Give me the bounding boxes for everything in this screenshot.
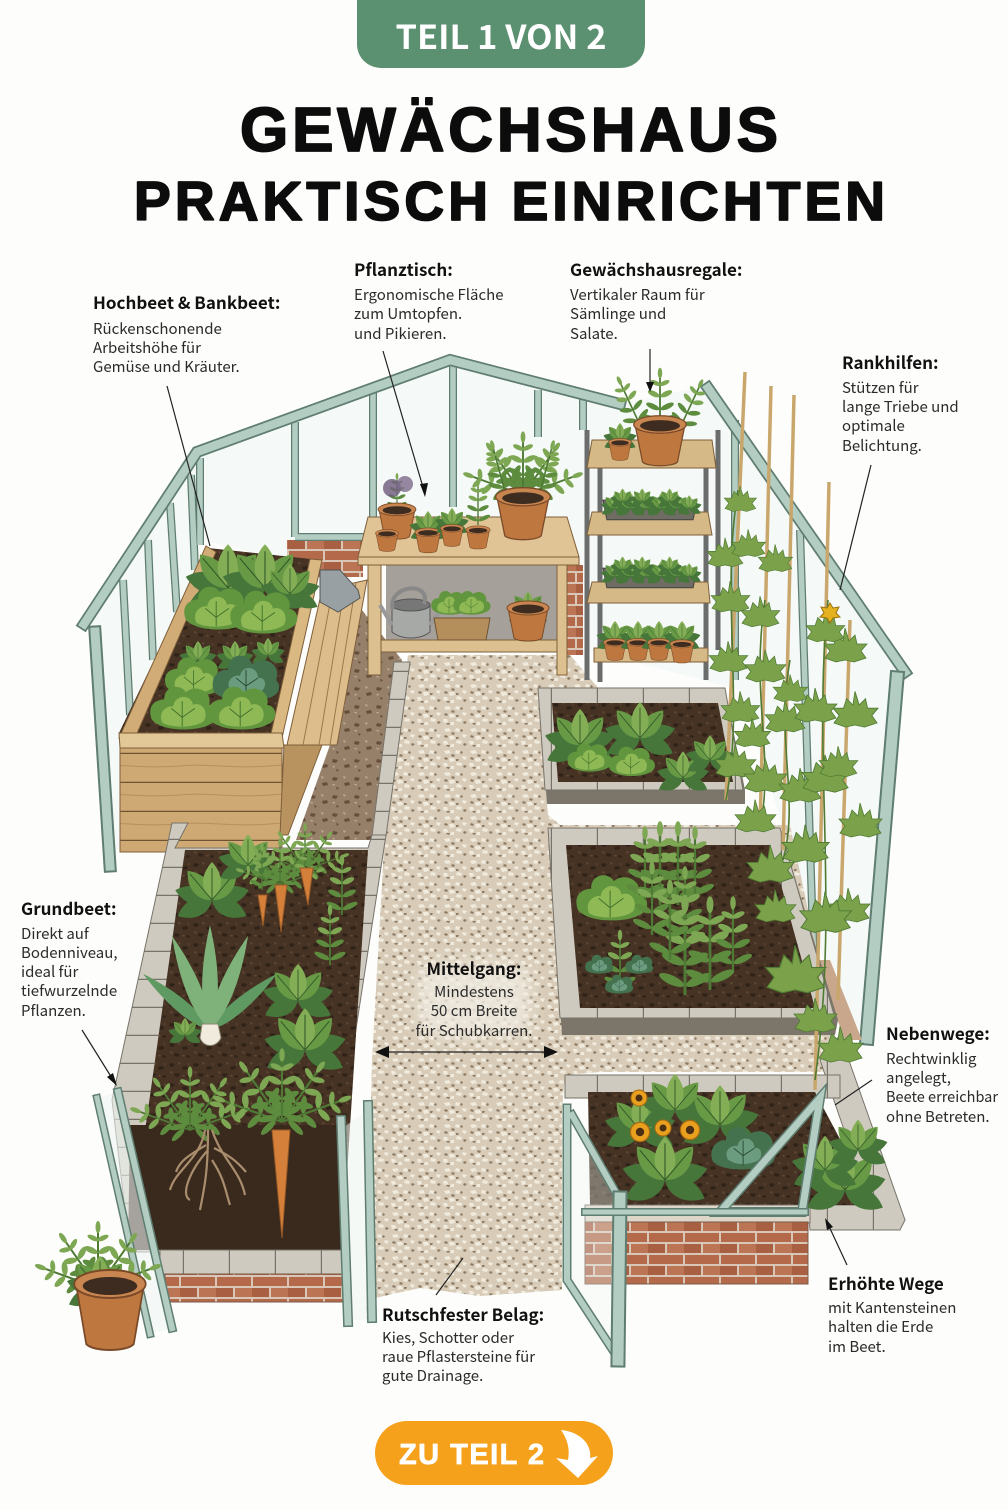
label: Hochbeet & Bankbeet: Arbeitshöhe für (93, 337, 201, 358)
yellow blossom (820, 603, 840, 623)
label: Pflanztisch: Ergonomische Fläche (354, 284, 504, 305)
title: PRAKTISCH EINRICHTEN (134, 170, 885, 232)
label: Rankhilfen: Stützen für (842, 377, 919, 398)
label: Nebenwege: Nebenwege: (886, 1020, 990, 1045)
terracotta pot in foreground (29, 1221, 167, 1350)
bench (280, 570, 367, 835)
label: Rankhilfen: optimale (842, 415, 905, 436)
icon: curved arrow (556, 1430, 598, 1478)
label: Mittelgang: Mindestens (434, 981, 514, 1002)
label: Pflanztisch: zum Umtopfen. (354, 303, 462, 324)
raised bed plants (150, 544, 321, 729)
label: Erhöhte Wege (828, 1270, 956, 1357)
label: Grundbeet: Direkt auf (21, 923, 90, 944)
label: Mittelgang (416, 955, 532, 1041)
label: Hochbeet & Bankbeet: Hochbeet & Bankbeet: (93, 289, 280, 314)
label: Erhöhte Wege: halten die Erde (828, 1316, 933, 1337)
label: Pflanztisch (354, 256, 504, 344)
title: GEWÄCHSHAUS (240, 96, 778, 165)
path edge stones (372, 662, 410, 836)
greenhouse structure: glass walls and frame (84, 360, 905, 1040)
button: to part 2: ZU TEIL 2 (399, 1439, 544, 1471)
label: Gewächshausregale: Salate. (570, 323, 618, 344)
watering can (380, 588, 445, 638)
panel: potting table (358, 431, 589, 675)
label: Nebenwege (886, 1020, 998, 1127)
panel: right bed 2 (548, 821, 838, 1035)
label: Erhöhte Wege: im Beet. (828, 1336, 886, 1357)
panel: ground-level bed (112, 823, 386, 1302)
terracotta pot on shelf (507, 591, 549, 641)
gravel main aisle and side paths (366, 655, 840, 1320)
panel: right bed 3 with brick base (565, 1035, 905, 1284)
label: Erhöhte Wege: mit Kantensteinen (828, 1297, 956, 1318)
label: Rankhilfen: lange Triebe und (842, 396, 959, 417)
label: Rankhilfen (842, 349, 959, 456)
panel: doors at right bed (567, 1098, 820, 1360)
label: Grundbeet: Bodenniveau, (21, 942, 118, 963)
header tab: part indicator: TEIL 1 VON 2 (396, 11, 606, 59)
label: Rankhilfen: Belichtung. (842, 435, 922, 456)
label: Grundbeet: tiefwurzelnde (21, 980, 117, 1001)
bed plants (124, 823, 359, 1238)
header tab: part indicator (357, 0, 645, 68)
label: Gewächshausregale: Vertikaler Raum für (570, 284, 705, 305)
panel: doors left of the main aisle (97, 1092, 372, 1334)
leader lines and arrows (82, 349, 872, 1295)
label: Gewächshausregale: Sämlinge und (570, 303, 666, 324)
label: Pflanztisch: Pflanztisch: (354, 256, 453, 281)
label: Grundbeet: Pflanzen. (21, 1000, 86, 1021)
trellis poles with climbing vines (707, 372, 882, 1090)
panel: raised bed with bench (119, 544, 367, 852)
label: Grundbeet: ideal für (21, 961, 79, 982)
label: Rutschfester Belag: raue Pflastersteine für (382, 1346, 535, 1367)
label: Mittelgang: 50 cm Breite (431, 1000, 517, 1021)
label: Pflanztisch: und Pikieren. (354, 323, 447, 344)
panel: greenhouse shelves (587, 368, 718, 682)
button: to part 2 (375, 1421, 613, 1485)
label: Nebenwege: angelegt, (886, 1067, 951, 1088)
label: Grundbeet: Grundbeet: (21, 895, 117, 920)
panel: right bed 1 (538, 688, 745, 804)
label: Mittelgang: Mittelgang: (427, 955, 521, 980)
label: Rankhilfen: Rankhilfen: (842, 349, 938, 374)
label: Rutschfester Belag: Rutschfester Belag: (382, 1301, 544, 1326)
flowers and vegetables (603, 1074, 889, 1217)
leek (139, 925, 281, 1046)
label: Rutschfester Belag: gute Drainage. (382, 1365, 483, 1386)
label: Nebenwege: Beete erreichbar (886, 1086, 998, 1107)
label: Erhöhte Wege: Erhöhte Wege (828, 1270, 944, 1295)
faded gravel behind the aisle label (418, 962, 530, 1038)
label: Hochbeet & Bankbeet (93, 289, 280, 377)
shelf plants (595, 368, 716, 663)
label: Nebenwege: ohne Betreten. (886, 1106, 990, 1127)
basket with seedlings (431, 591, 490, 640)
label: Grundbeet (21, 895, 118, 1021)
title (134, 96, 885, 232)
dirt floor beside bench (296, 610, 402, 840)
label: Mittelgang: für Schubkarren. (416, 1020, 532, 1041)
label: Hochbeet & Bankbeet: Gemüse und Kräuter. (93, 356, 240, 377)
label: Hochbeet & Bankbeet: Rückenschonende (93, 318, 222, 339)
roots and carrot cross-section (170, 1130, 290, 1238)
label: Rutschfester Belag (382, 1301, 544, 1386)
label: Nebenwege: Rechtwinklig (886, 1048, 977, 1069)
table plants and pots (375, 431, 589, 553)
label: Rutschfester Belag: Kies, Schotter oder (382, 1327, 514, 1348)
label: Gewächshausregale (570, 256, 742, 344)
label: Gewächshausregale: Gewächshausregale: (570, 256, 742, 281)
